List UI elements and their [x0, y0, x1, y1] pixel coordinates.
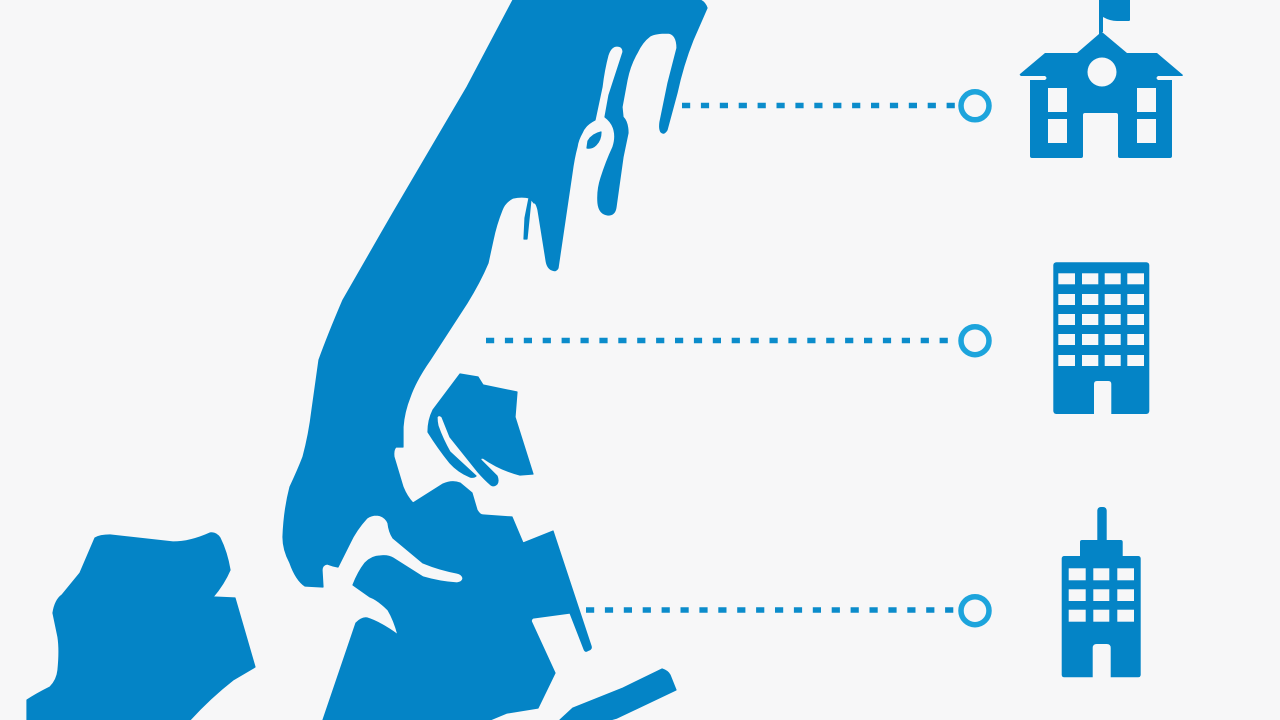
- ring marker: [961, 92, 989, 120]
- dotted line to office block: [486, 338, 962, 343]
- map: small island inside the bulb: [587, 132, 601, 148]
- dotted line to school: [682, 103, 958, 108]
- map of New York City: [27, 0, 707, 720]
- windows: [1069, 568, 1134, 622]
- windows: [1058, 273, 1144, 366]
- map: Staten Island: [27, 533, 255, 720]
- ring marker: [961, 327, 989, 355]
- ring marker: [961, 597, 989, 625]
- map: Manhattan, Brooklyn and the Bronx landmass: [283, 0, 707, 720]
- dotted line to skyscraper: [586, 607, 958, 613]
- map: Queens wedge: [428, 374, 533, 486]
- door: [1093, 644, 1111, 678]
- connector: skyscraper: [586, 597, 989, 625]
- icon: office block: [1053, 262, 1149, 414]
- map: Long Island tip: [560, 669, 676, 720]
- icon: skyscraper: [1062, 507, 1141, 678]
- icon: school: [1020, 0, 1183, 158]
- connector: office block: [486, 327, 989, 355]
- door: [1094, 381, 1111, 414]
- connector: school: [682, 92, 989, 120]
- map: Bronx Kill sliver: [524, 198, 531, 239]
